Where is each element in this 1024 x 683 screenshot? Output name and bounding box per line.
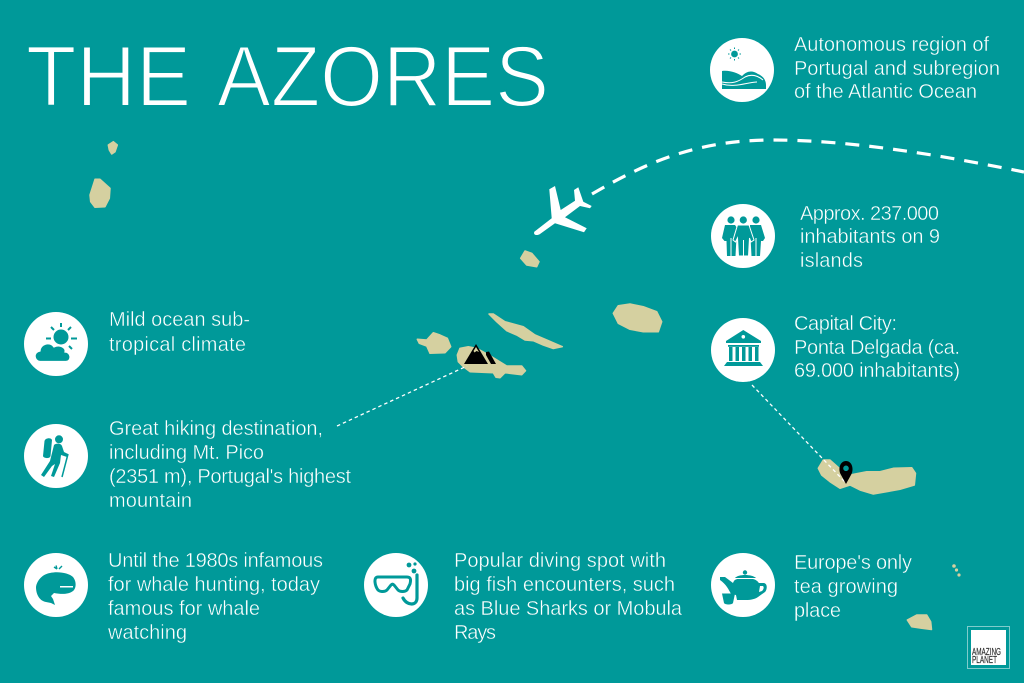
- island: Pico: [457, 347, 526, 378]
- flight path: [592, 140, 1024, 194]
- logo: Amazing Planet: AMAZING: [972, 646, 1001, 658]
- title: AZORES: [217, 29, 549, 125]
- text: hiking: mountain: [109, 490, 192, 512]
- text: whaling: Until the 1980s infamous: [108, 550, 323, 572]
- icon: landscape: [710, 38, 774, 102]
- text: diving: as Blue Sharks or Mobula: [454, 598, 683, 620]
- panel: region: [710, 34, 1000, 103]
- connector: Pico: [337, 366, 467, 426]
- text: hiking: [109, 418, 351, 512]
- text: region: Autonomous region of: [794, 34, 989, 56]
- text: diving: [454, 550, 683, 644]
- text: diving: Popular diving spot with: [454, 550, 666, 572]
- icon: people: [711, 204, 775, 268]
- panel: climate: [24, 309, 250, 376]
- icon: teapot: [711, 553, 775, 617]
- island: Corvo: [108, 142, 117, 154]
- island: Graciosa: [521, 251, 539, 267]
- text: tea: Europe's only: [794, 552, 912, 574]
- icon: airplane: [534, 186, 592, 235]
- island: Faial: [417, 333, 451, 353]
- island: Flores: [90, 179, 110, 207]
- island: Sao Miguel: [818, 460, 916, 494]
- text: capital: 69.000 inhabitants): [794, 360, 960, 382]
- text: whaling: for whale hunting, today: [108, 574, 320, 596]
- icon: snorkel mask: [364, 553, 428, 617]
- panel: capital: [711, 313, 960, 382]
- panel: population: [711, 203, 940, 272]
- text: hiking: (2351 m), Portugal's highest: [109, 466, 351, 488]
- icon: hiker: [24, 424, 88, 488]
- text: diving: big fish encounters, such: [454, 574, 675, 596]
- text: population: islands: [800, 250, 863, 272]
- map: islands: [90, 142, 961, 629]
- icon: museum building: [711, 318, 775, 382]
- text: climate: Mild ocean sub-: [109, 309, 250, 331]
- text: hiking: including Mt. Pico: [109, 442, 264, 464]
- text: capital: [794, 313, 960, 382]
- text: tea: [794, 552, 912, 622]
- panel: whaling: [24, 550, 323, 644]
- logo: Amazing Planet: PLANET: [972, 655, 997, 666]
- island: Santa Maria: [907, 615, 932, 630]
- text: climate: [109, 309, 250, 356]
- icon: sun and cloud: [24, 312, 88, 376]
- text: population: Approx. 237.000: [800, 203, 939, 225]
- connector: Ponta Delgada: [752, 385, 845, 482]
- island: Formigas: [952, 564, 961, 577]
- text: region: Portugal and subregion: [794, 58, 1000, 80]
- text: hiking: Great hiking destination,: [109, 418, 323, 440]
- text: tea: place: [794, 600, 841, 622]
- text: diving: Rays: [454, 622, 496, 644]
- island: Sao Jorge: [489, 314, 562, 348]
- text: population: [800, 203, 940, 272]
- icon: mountain: [464, 344, 496, 364]
- text: whaling: watching: [107, 622, 187, 644]
- text: whaling: [107, 550, 323, 644]
- title: [26, 29, 549, 125]
- panel: diving: [364, 550, 683, 644]
- text: whaling: famous for whale: [108, 598, 260, 620]
- icon: whale: [24, 553, 88, 617]
- text: region: [794, 34, 1000, 103]
- text: tea: tea growing: [794, 576, 898, 598]
- panel: hiking: [24, 418, 351, 512]
- title: THE: [26, 29, 191, 125]
- text: population: inhabitants on 9: [800, 226, 940, 248]
- text: climate: tropical climate: [109, 334, 246, 356]
- panel: tea: [711, 552, 912, 622]
- icon: map pin: [839, 461, 853, 484]
- text: region: of the Atlantic Ocean: [794, 81, 977, 103]
- island: Terceira: [613, 304, 662, 332]
- text: capital: Ponta Delgada (ca.: [794, 337, 960, 359]
- text: capital: Capital City:: [794, 313, 897, 335]
- logo: Amazing Planet: [968, 626, 1010, 668]
